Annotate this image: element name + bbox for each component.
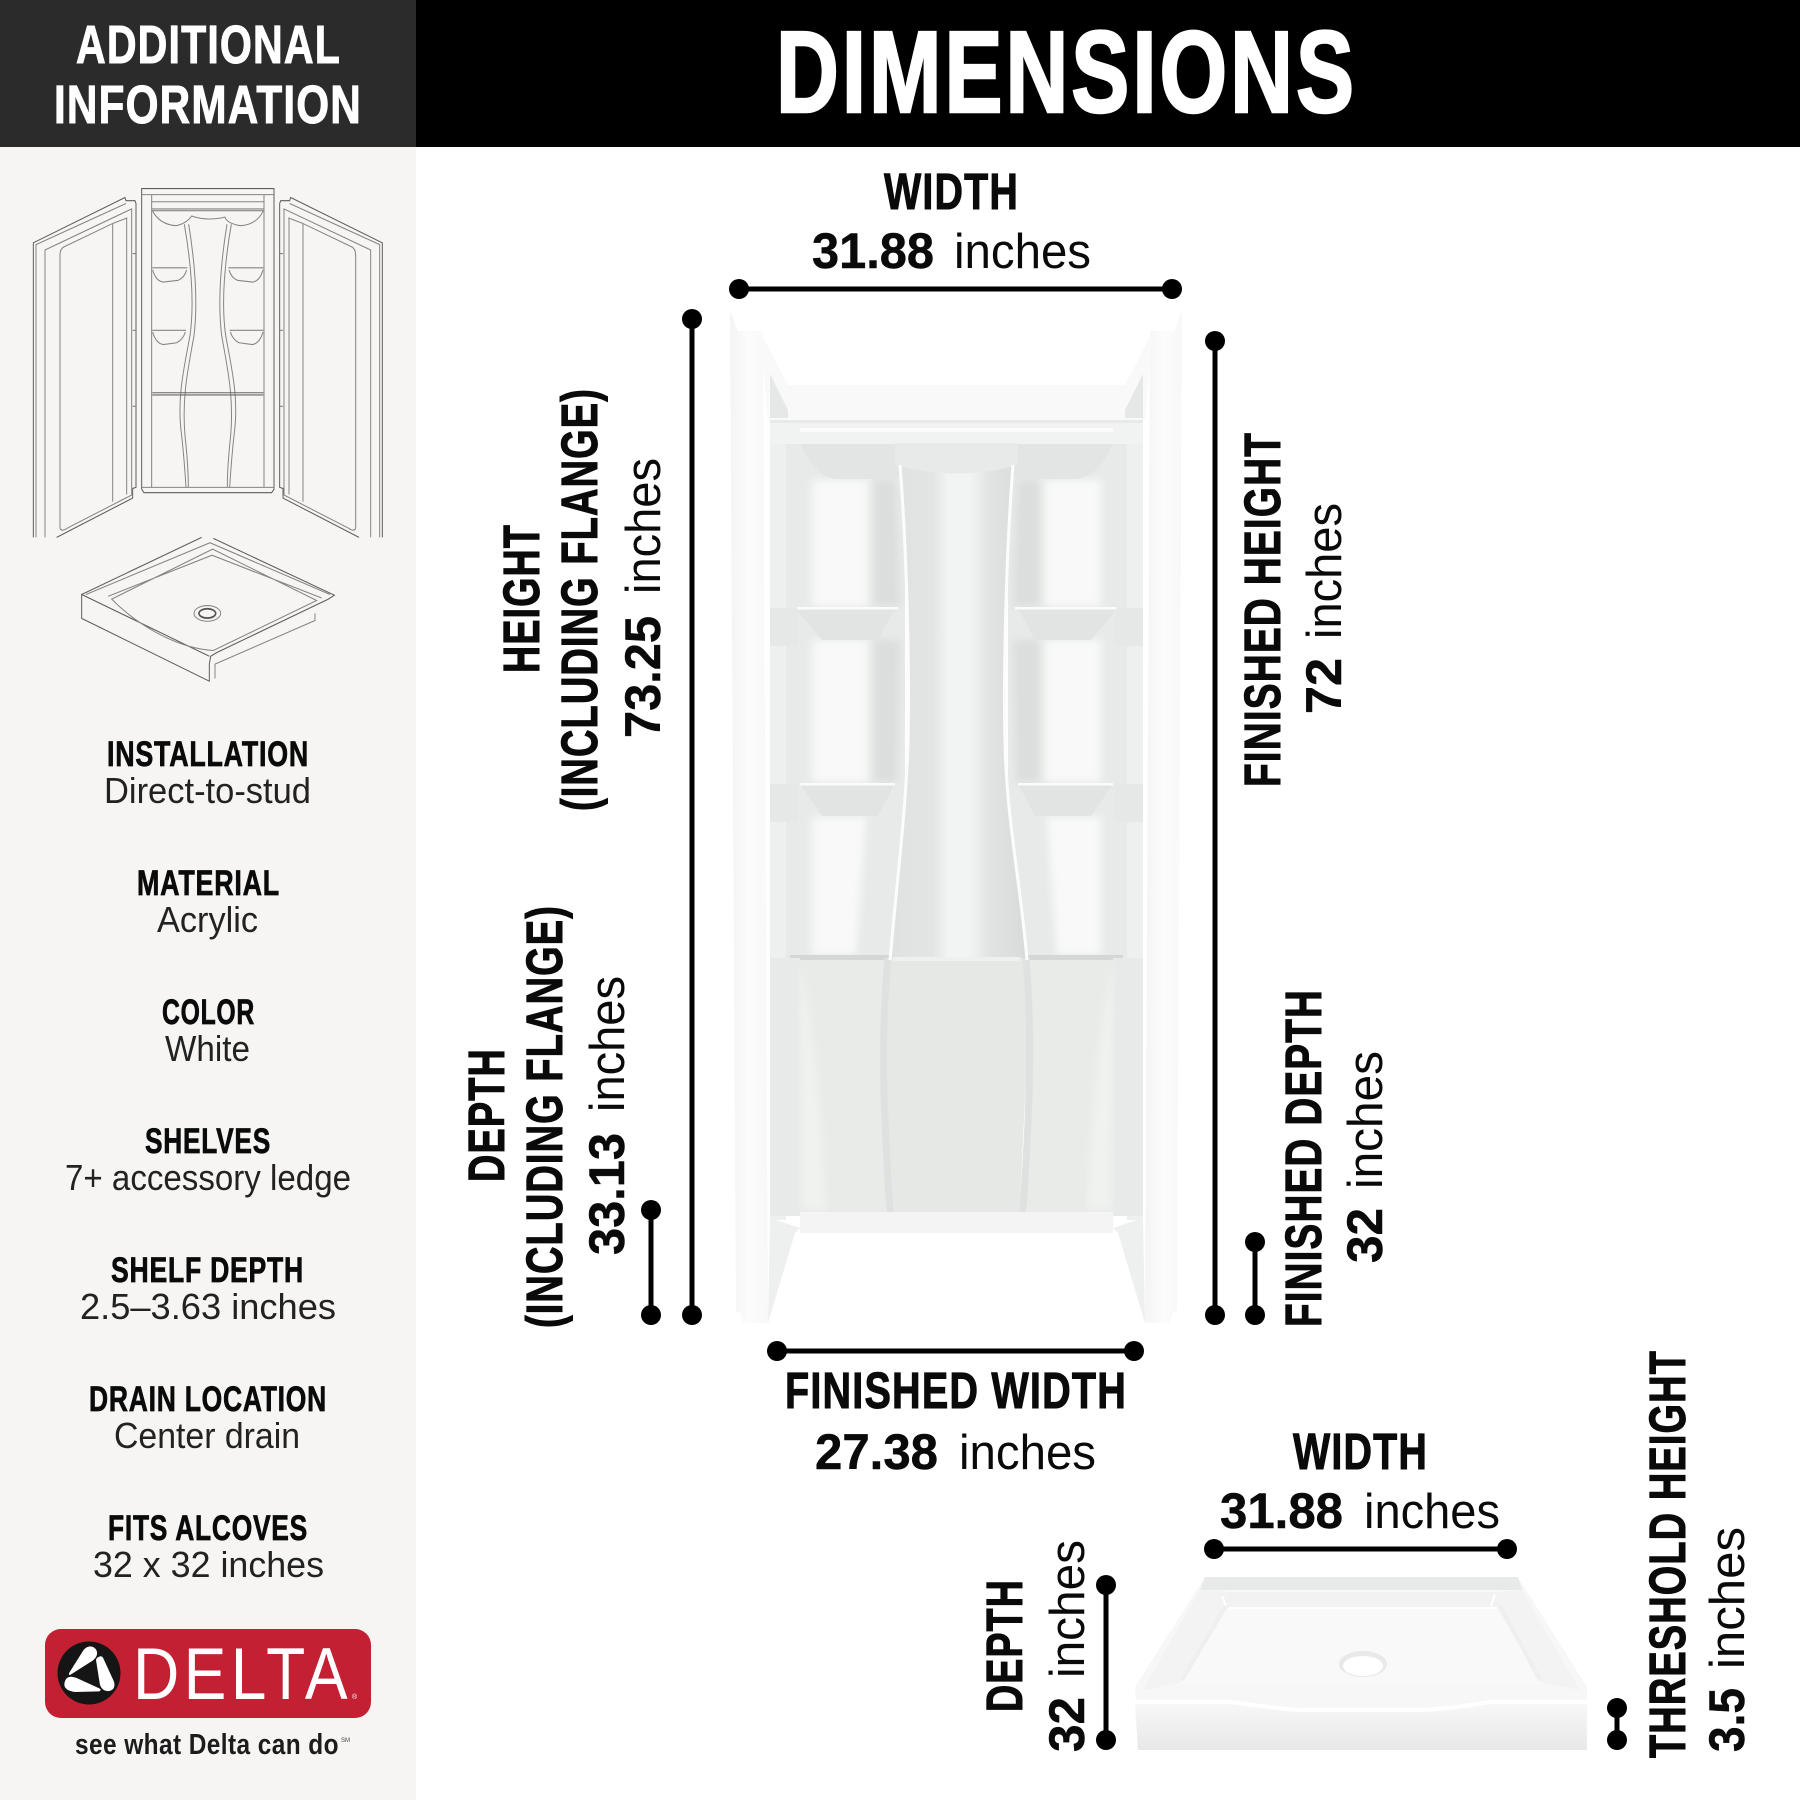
dimension: base depth: DEPTH (976, 1579, 1033, 1712)
dimension: top width (729, 163, 1182, 299)
dimension: threshold height: THRESHOLD HEIGHT (1639, 1350, 1696, 1758)
spec: shelf depth: 2.5–3.63 inches (80, 1286, 336, 1327)
dimension: finished width (767, 1341, 1144, 1480)
dimension: finished depth (1245, 989, 1393, 1327)
dimension: base width (1204, 1423, 1517, 1559)
spec: fits alcoves: 32 x 32 inches (93, 1544, 324, 1585)
dimension: depth including flange (458, 905, 661, 1328)
dimension: top width: 31.88 (812, 223, 934, 279)
dimension: threshold height: 3.5 (1699, 1688, 1755, 1752)
spec: drain location (89, 1380, 327, 1456)
spec: shelf depth: SHELF DEPTH (111, 1251, 304, 1290)
spec: material (137, 864, 280, 940)
dimension: height including flange: 73.25 (615, 616, 671, 738)
logo: delta: SM (341, 1738, 350, 1744)
dimension: base depth (976, 1540, 1116, 1752)
spec: shelves (65, 1122, 351, 1198)
dimension: depth including flange: 33.13 (579, 1133, 635, 1255)
dimension: finished height: 72 (1296, 658, 1352, 714)
dimension: finished height: inches (1298, 503, 1352, 639)
dimension: height including flange: inches (617, 458, 671, 594)
center lower panel (884, 958, 1028, 1212)
header: additional information: INFORMATION (54, 75, 362, 135)
spec: shelf depth (80, 1251, 336, 1327)
spec: color: COLOR (162, 993, 255, 1032)
spec: material: Acrylic (157, 899, 258, 940)
image: shower base (1135, 1577, 1587, 1750)
dimension: finished width: inches (959, 1426, 1096, 1480)
spec: material: MATERIAL (137, 864, 280, 903)
spec: installation (104, 735, 311, 811)
dimension: base width: inches (1364, 1485, 1500, 1539)
dimension: finished height: FINISHED HEIGHT (1234, 432, 1291, 787)
dimension: top width: inches (954, 225, 1091, 279)
spec: drain location: DRAIN LOCATION (89, 1380, 327, 1419)
icon: center wall panel (142, 189, 274, 493)
dimension: base depth: inches (1041, 1540, 1095, 1678)
dimension: height including flange: (INCLUDING FLANGE) (551, 388, 608, 811)
spec: color: White (165, 1028, 250, 1069)
dimension: height including flange: HEIGHT (493, 524, 550, 673)
logo: delta (45, 1629, 371, 1761)
panel: sidebar (0, 147, 416, 1800)
logo: delta: ® (352, 1693, 358, 1701)
dimension: finished depth: inches (1339, 1051, 1393, 1189)
spec: fits alcoves (93, 1509, 324, 1585)
center column (892, 465, 1027, 960)
bottom ledge (800, 1212, 1113, 1233)
dimension: threshold height (1607, 1350, 1755, 1758)
spec: shelves: SHELVES (145, 1122, 271, 1161)
icon: right wall panel (280, 197, 382, 537)
dimension: base depth: 32 (1039, 1697, 1095, 1752)
spec: installation: Direct-to-stud (104, 770, 311, 811)
logo: delta: see what Delta can do (75, 1729, 339, 1761)
spec: drain location: Center drain (114, 1415, 300, 1456)
header: additional information (0, 0, 416, 147)
header: additional information: ADDITIONAL (76, 15, 341, 75)
dimension: height including flange (493, 309, 702, 1325)
logo: delta: DELTA (133, 1634, 352, 1715)
spec: installation: INSTALLATION (107, 735, 309, 774)
dimension: finished width: FINISHED WIDTH (785, 1362, 1127, 1419)
icon: left wall panel (33, 197, 136, 537)
image: shower walls (730, 311, 1182, 1323)
dimension: base width: 31.88 (1220, 1483, 1343, 1539)
dimension: threshold height: inches (1701, 1527, 1755, 1669)
title: dimensions (416, 0, 1800, 147)
dimension: finished width: 27.38 (815, 1424, 938, 1480)
icon: shower base (82, 537, 334, 681)
line drawing: shower walls and base (33, 189, 382, 681)
dimension: finished height (1205, 331, 1352, 1325)
dimension: depth including flange: DEPTH (458, 1048, 515, 1182)
spec: shelves: 7+ accessory ledge (65, 1157, 351, 1198)
spec: color (162, 993, 255, 1069)
dimension: finished depth: 32 (1337, 1208, 1393, 1263)
dimension: top width: WIDTH (884, 163, 1019, 220)
dimension: base width: WIDTH (1293, 1423, 1428, 1480)
title: dimensions: DIMENSIONS (776, 7, 1357, 137)
spec: fits alcoves: FITS ALCOVES (108, 1509, 308, 1548)
dimension: finished depth: FINISHED DEPTH (1275, 989, 1332, 1327)
dimension: depth including flange: (INCLUDING FLANGE) (516, 905, 573, 1328)
dimension: depth including flange: inches (581, 976, 635, 1112)
